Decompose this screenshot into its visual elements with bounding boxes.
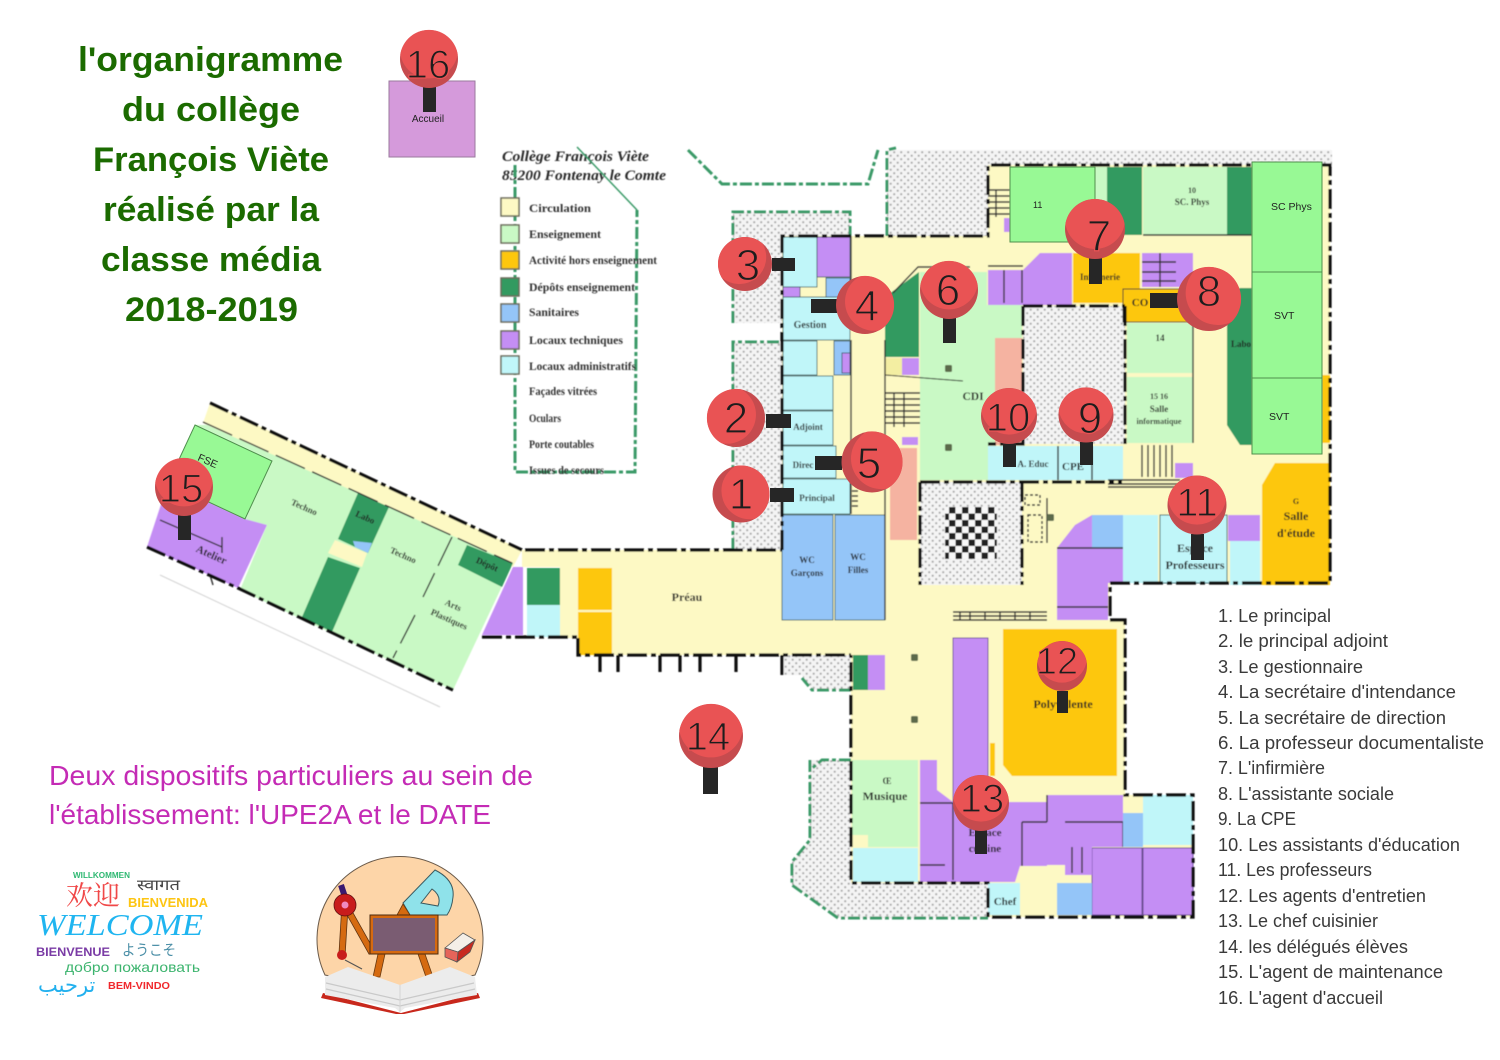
numbered list of staff: 1. Le principal (1218, 605, 1331, 626)
icon: multilingual welcome word cloud: WILLKOMMEN (73, 871, 130, 880)
pin 15 (155, 458, 213, 540)
room labels: informatique (1137, 417, 1182, 426)
legend: Issues de secours (529, 463, 604, 477)
legend: Façades vitrées (529, 384, 597, 398)
room labels: Plastiques (429, 607, 470, 632)
room labels: Arts (443, 597, 463, 613)
pin 13: 13 (960, 777, 1004, 821)
pin 2: 2 (724, 394, 748, 443)
rooms: east wing (953, 167, 1330, 620)
title: réalisé par la (103, 191, 320, 229)
room labels: Salle (1284, 509, 1309, 523)
room labels: Chef (994, 896, 1017, 908)
room labels: Direc (793, 460, 813, 470)
legend: Oculars (529, 411, 561, 425)
pin 13 (953, 775, 1009, 854)
pin 16: 16 (406, 43, 450, 87)
room labels: Gestion (794, 320, 827, 331)
pin 3 (707, 226, 795, 295)
legend: Enseignement (529, 227, 601, 241)
building base: circulation (578, 165, 1330, 917)
icon: multilingual welcome word cloud: BIENVENIDA (128, 895, 209, 910)
pin 11 (1168, 476, 1226, 560)
pin 1 (712, 458, 794, 527)
pin 1: 1 (729, 470, 753, 519)
room labels: SC. Phys (1175, 197, 1210, 207)
pin 5 (815, 423, 911, 497)
numbered list of staff: 2. le principal adjoint (1218, 630, 1388, 651)
room labels: Espace (1177, 541, 1214, 555)
title (78, 41, 343, 329)
room labels: CDI (962, 391, 984, 403)
administration rooms (782, 237, 885, 620)
room labels: Préau (672, 590, 703, 604)
room labels: WC (850, 552, 866, 562)
icon: multilingual welcome word cloud: BEM-VINDO (108, 981, 170, 992)
title: l'organigramme (78, 41, 343, 79)
pin 12 (1036, 641, 1087, 713)
numbered list of staff: 13. Le chef cuisinier (1218, 910, 1378, 931)
numbered list of staff: 8. L'assistante sociale (1218, 783, 1394, 804)
legend: Activité hors enseignement (529, 253, 657, 267)
legend: Locaux techniques (529, 333, 623, 347)
room labels: Techno (290, 497, 319, 518)
pin 8: 8 (1197, 267, 1221, 316)
numbered list of staff: 9. La CPE (1218, 808, 1296, 829)
numbered list of staff: 5. La secrétaire de direction (1218, 707, 1446, 728)
title: 2018-2019 (125, 291, 298, 329)
pin 4: 4 (855, 282, 879, 331)
pin 7 (1065, 199, 1125, 284)
bright room labels: SVT (1269, 411, 1290, 423)
room labels: 15 16 (1150, 392, 1168, 401)
pin 7: 7 (1087, 212, 1111, 261)
icon: multilingual welcome word cloud: ようこそ (122, 939, 176, 960)
bright room labels: SVT (1274, 310, 1295, 322)
bright room labels (196, 200, 1312, 471)
pin 9 (1058, 387, 1114, 465)
pin 14: 14 (686, 715, 730, 759)
numbered list of staff: 14. les délégués élèves (1218, 936, 1408, 957)
room labels: 14 (1156, 333, 1165, 343)
reception box: Accueil (412, 114, 444, 125)
room labels: CO (1132, 297, 1149, 309)
room labels: 10 (1188, 186, 1196, 195)
room labels: G (1293, 497, 1299, 506)
legend: Locaux administratifs (529, 359, 636, 373)
room labels: Musique (863, 789, 908, 803)
room labels: cuisine (969, 843, 1001, 855)
pin 14 (679, 704, 743, 794)
numbered list of staff (1218, 605, 1484, 1008)
pin 11: 11 (1176, 481, 1218, 525)
pin 2 (699, 381, 791, 452)
bright green overlay rooms (168, 162, 1322, 519)
pin 5: 5 (857, 439, 881, 488)
pin 6 (920, 261, 978, 343)
icon: multilingual welcome word cloud (36, 871, 209, 997)
pink note on special programmes (49, 760, 533, 830)
legend (501, 147, 666, 477)
room labels: A. Educ (1017, 459, 1049, 469)
room labels: Labo (354, 509, 377, 526)
room labels: d'étude (1277, 526, 1316, 540)
courtyards (920, 306, 1125, 585)
legend: Porte coutables (529, 437, 594, 451)
outdoor dotted areas (688, 148, 1332, 918)
icon: multilingual welcome word cloud: BIENVENUE (36, 945, 110, 959)
rooms: CDI wing (852, 190, 1072, 543)
room labels: WC (799, 555, 815, 565)
legend: 85200 Fontenay le Comte (502, 168, 666, 184)
numbered list of staff: 15. L'agent de maintenance (1218, 961, 1443, 982)
pin 8 (1150, 255, 1253, 337)
pin 3: 3 (736, 241, 760, 290)
room labels: Techno (389, 545, 418, 566)
room labels: Filles (848, 565, 869, 575)
title: François Viète (93, 141, 329, 179)
bright room labels: 11 (1033, 200, 1042, 210)
legend: Collège François Viète (502, 149, 649, 165)
legend: Sanitaires (529, 305, 579, 319)
numbered list of staff: 6. La professeur documentaliste (1218, 732, 1484, 753)
bright room labels: FSE (196, 452, 219, 471)
floor plan of the school (147, 147, 1332, 918)
numbered list of staff: 3. Le gestionnaire (1218, 656, 1363, 677)
legend: Circulation (529, 201, 591, 215)
pin 10: 10 (986, 396, 1030, 440)
icon: multilingual welcome word cloud: 欢迎 (66, 874, 120, 913)
room labels: Garçons (791, 568, 824, 578)
icon: multilingual welcome word cloud: добро пожаловать (65, 959, 200, 975)
legend: Dépôts enseignement (529, 280, 635, 294)
icon: multilingual welcome word cloud: स्वागत (137, 876, 181, 894)
numbered list of staff: 11. Les professeurs (1218, 859, 1372, 880)
building walls (525, 165, 1330, 917)
room: chessboard courtyard (945, 507, 997, 559)
room labels: CPE (1062, 461, 1084, 473)
room labels (194, 186, 1316, 908)
room labels: Adjoint (793, 422, 823, 432)
room labels: Espace (968, 827, 1002, 839)
room labels: Dépôt (475, 555, 500, 574)
numbered list of staff: 12. Les agents d'entretien (1218, 885, 1426, 906)
room labels: Polyvalente (1033, 697, 1093, 711)
room labels: Labo (1231, 339, 1252, 349)
pin 4 (811, 268, 902, 339)
room labels: Infirmerie (1080, 272, 1120, 282)
pin 9: 9 (1078, 394, 1102, 443)
icon: multilingual welcome word cloud: WELCOME (37, 907, 203, 942)
reception box (389, 81, 475, 157)
title: classe média (101, 241, 322, 279)
room labels: Salle (1150, 404, 1168, 414)
room labels: Professeurs (1165, 558, 1225, 572)
pin 6: 6 (936, 266, 960, 315)
bright room labels: SC Phys (1271, 201, 1312, 213)
pin 16 (400, 30, 458, 112)
room labels: Principal (799, 493, 835, 503)
icon: book, compass, blackboard, protractor and eraser (317, 856, 483, 1014)
numbered list of staff: 16. L'agent d'accueil (1218, 987, 1383, 1008)
room labels: Œ (882, 776, 892, 786)
numbered list of staff: 4. La secrétaire d'intendance (1218, 681, 1456, 702)
pink note on special programmes: l'établissement: l'UPE2A et le DATE (49, 799, 491, 830)
rooms: south wing (522, 550, 1193, 915)
room labels: Atelier (194, 543, 229, 567)
title: du collège (122, 91, 300, 129)
numbered list of staff: 10. Les assistants d'éducation (1218, 834, 1460, 855)
pin 12: 12 (1036, 641, 1078, 683)
pink note on special programmes: Deux dispositifs particuliers au sein de (49, 760, 533, 791)
west wing (147, 403, 578, 707)
numbered list of staff: 7. L'infirmière (1218, 757, 1325, 778)
icon: multilingual welcome word cloud: ترحيب (38, 973, 96, 997)
pin 10 (981, 388, 1037, 467)
pin 15: 15 (159, 467, 203, 511)
